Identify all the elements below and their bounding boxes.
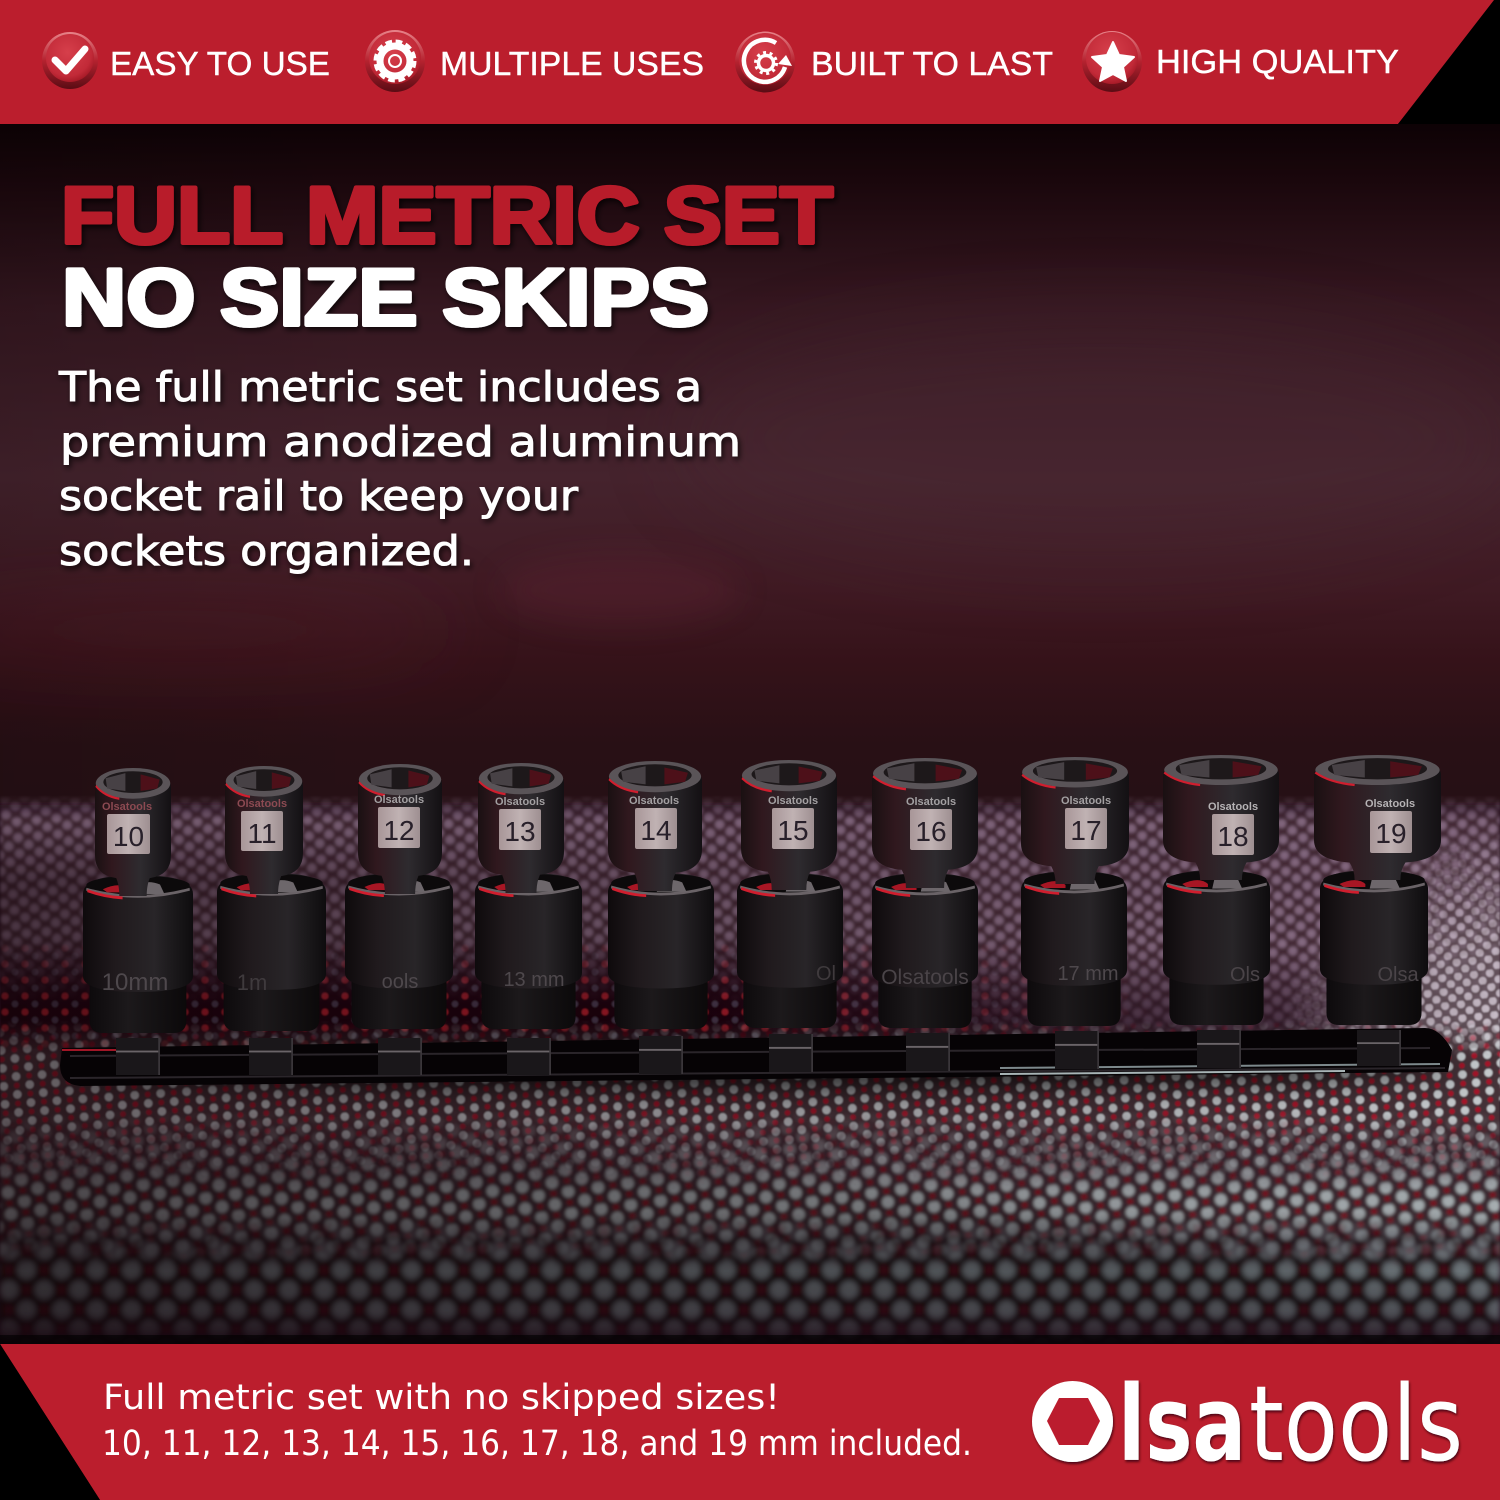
size label 12: 12 [383,815,415,846]
socket 11mm: 1m [237,970,267,995]
size label 19: Olsatools [1365,798,1415,810]
size label 10 [102,801,152,854]
size label 10: 10 [113,821,144,852]
footer text: 10, 11, 12, 13, 14, 15, 16, 17, 18, and 19 mm included. [102,1424,972,1464]
footer text [102,1378,972,1464]
feature: built to last [735,32,1053,92]
top banner [0,0,1500,124]
socket 13mm: 13 mm [503,969,565,991]
size label 15: 15 [777,815,809,846]
socket 12mm [345,764,453,1075]
icon: cycle gear [735,32,795,92]
socket 11mm [217,766,326,1075]
size label 17 [1061,795,1111,849]
body text: premium anodized aluminum [60,418,741,466]
logo [1032,1363,1463,1485]
socket 15mm: Ol [816,963,836,985]
feature: easy to use: EASY TO USE [110,45,330,82]
socket 10mm: 10mm [102,969,168,996]
size label 12 [374,794,424,848]
body text: The full metric set includes a [58,363,702,411]
logo: tools [1249,1363,1463,1485]
body text: sockets organized. [59,527,474,575]
headline: NO SIZE SKIPS [62,253,709,343]
feature: high quality: HIGH QUALITY [1156,43,1399,80]
icon: check mark [42,32,98,89]
body text [58,363,741,575]
socket 18mm [1163,755,1279,1068]
size label 11 [237,798,287,851]
size label 14: 14 [640,815,672,846]
size label 10: Olsatools [102,801,152,813]
socket 15mm [737,760,843,1072]
size label 19 [1365,798,1415,853]
feature: multiple uses [365,30,704,92]
socket 13mm [475,763,582,1075]
size label 14 [629,795,679,849]
headline [61,171,833,343]
socket 14mm [608,761,714,1074]
size label 16 [906,796,956,850]
logo: lsa [1118,1363,1246,1485]
body text: socket rail to keep your [59,472,578,520]
feature: multiple uses: MULTIPLE USES [440,45,704,82]
size label 18 [1208,801,1258,855]
size label 11: 11 [247,818,277,849]
socket rail [60,1028,1460,1088]
size label 15 [768,795,818,849]
socket 16mm: Olsatools [881,966,969,989]
socket 17mm: 17 mm [1057,963,1119,985]
footer banner [0,1344,1500,1500]
headline: FULL METRIC SET [61,171,833,261]
size label 12: Olsatools [374,794,424,806]
size label 14: Olsatools [629,795,679,807]
size label 19: 19 [1375,818,1407,849]
feature: built to last: BUILT TO LAST [811,45,1053,82]
size label 18: 18 [1217,821,1249,852]
size label 17: Olsatools [1061,795,1111,807]
socket 10mm [83,768,193,1075]
photo background [0,120,1500,840]
socket 18mm: Ols [1230,964,1260,986]
logo: O [1036,1363,1110,1485]
size label 16: 16 [915,816,947,847]
socket 19mm [1314,755,1441,1066]
size label 16: Olsatools [906,796,956,808]
socket 16mm [872,758,978,1071]
size label 13 [495,796,545,850]
footer text: Full metric set with no skipped sizes! [103,1378,780,1418]
size label 18: Olsatools [1208,801,1258,813]
feature: high quality [1082,31,1399,92]
size label 17: 17 [1070,815,1102,846]
fabric mat texture [0,780,1500,1365]
size label 13: 13 [504,816,536,847]
socket 19mm: Olsa [1377,964,1419,986]
size label 15: Olsatools [768,795,818,807]
socket 17mm [1021,757,1129,1069]
size label 13: Olsatools [495,796,545,808]
feature: easy to use [42,32,330,89]
icon: gear [365,30,425,92]
socket 12mm: ools [382,971,418,993]
size label 11: Olsatools [237,798,287,810]
icon: star [1082,31,1142,92]
